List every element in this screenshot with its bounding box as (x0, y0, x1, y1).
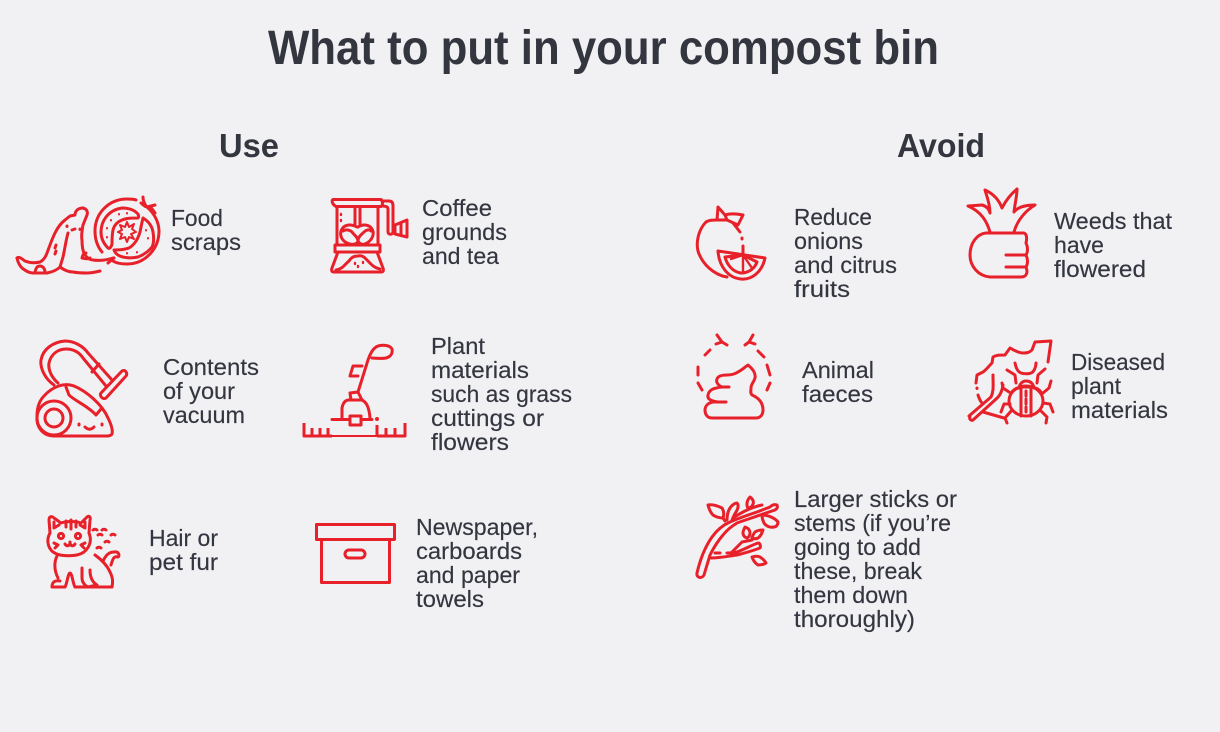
text: food scraps: scraps (171, 229, 241, 255)
icon: food scraps (17, 197, 159, 273)
text: larger sticks: thoroughly) (794, 606, 915, 632)
text: hair: pet fur (149, 549, 218, 575)
text: weeds: flowered (1054, 256, 1146, 282)
text: citrus: Reduce (794, 204, 872, 230)
text: plant materials (431, 333, 572, 455)
text: plant materials: materials (431, 357, 529, 383)
text: faeces (802, 357, 874, 407)
icon: weeds in hand (968, 189, 1035, 277)
text: citrus: fruits (794, 276, 850, 302)
text: food scraps: Food (171, 205, 223, 231)
heading: avoid: Avoid (897, 127, 985, 164)
icon: cat (48, 516, 119, 587)
text: newspaper: towels (416, 586, 484, 612)
text: plant materials: Plant (431, 333, 486, 359)
text: larger sticks: going to add (794, 534, 921, 560)
text: newspaper (416, 514, 538, 612)
text: diseased: materials (1071, 397, 1168, 423)
text: citrus (794, 204, 897, 302)
text: larger sticks: stems (if you’re (794, 510, 951, 536)
text: citrus: and citrus (794, 252, 897, 278)
text: weeds: have (1054, 232, 1104, 258)
icon: animal faeces (698, 335, 770, 418)
text: faeces: faeces (802, 381, 873, 407)
text: coffee: grounds (422, 219, 507, 245)
heading: use: Use (219, 127, 279, 164)
text: faeces: Animal (802, 357, 874, 383)
text: plant materials: cuttings or (431, 405, 544, 431)
text: newspaper: and paper (416, 562, 520, 588)
icon: paper box (316, 524, 394, 582)
text: diseased (1071, 349, 1168, 423)
text: coffee: Coffee (422, 195, 492, 221)
text: hair (149, 525, 218, 575)
text: weeds (1054, 208, 1173, 282)
text: weeds: Weeds that (1054, 208, 1173, 234)
text: larger sticks: these, break (794, 558, 922, 584)
text: larger sticks: Larger sticks or (794, 486, 957, 512)
text: newspaper: carboards (416, 538, 522, 564)
text: coffee (422, 195, 507, 269)
title: What to put in your compost bin (268, 22, 939, 75)
icon: vacuum cleaner (37, 341, 127, 436)
text: hair: Hair or (149, 525, 218, 551)
text: vacuum: Contents (163, 354, 259, 380)
text: vacuum (163, 354, 259, 428)
text: diseased: Diseased (1071, 349, 1165, 375)
text: citrus: onions (794, 228, 863, 254)
icon: grass trimmer (304, 345, 405, 436)
icon: branch (697, 497, 778, 577)
text: larger sticks: them down (794, 582, 908, 608)
text: vacuum: vacuum (163, 402, 245, 428)
icon: coffee grinder (332, 200, 407, 272)
text: diseased: plant (1071, 373, 1122, 399)
icon: diseased leaf with beetle (969, 341, 1053, 423)
text: coffee: and tea (422, 243, 499, 269)
text: vacuum: of your (163, 378, 235, 404)
text: plant materials: flowers (431, 429, 509, 455)
icon: citrus (697, 207, 765, 279)
text: plant materials: such as grass (431, 381, 572, 407)
text: larger sticks (794, 486, 957, 632)
text: food scraps (171, 205, 241, 255)
text: newspaper: Newspaper, (416, 514, 538, 540)
